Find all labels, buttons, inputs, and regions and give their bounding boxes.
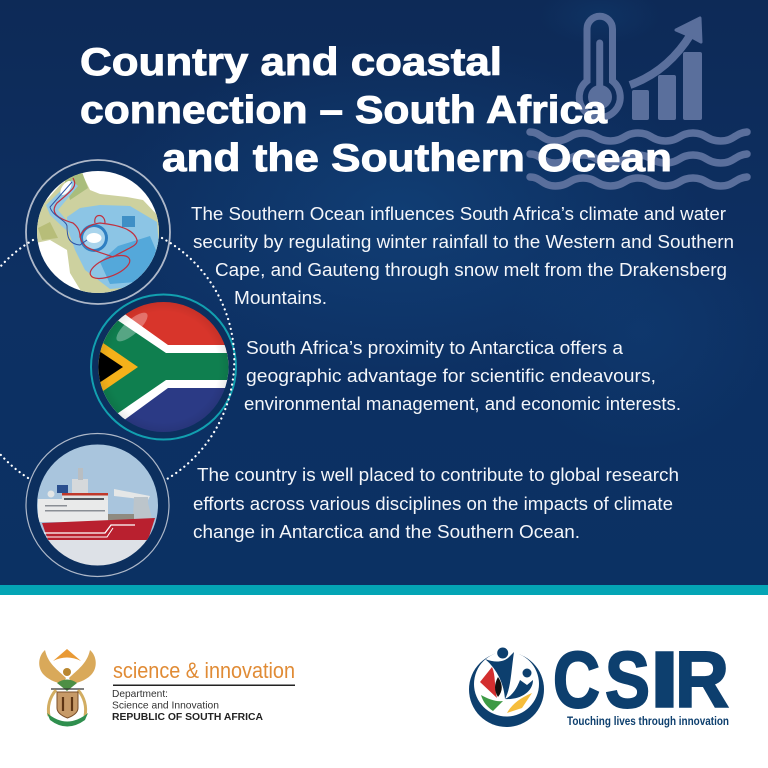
text block: proximity to Antarctica: geographic advantage for scientific endeavours,: [246, 365, 656, 386]
text block: climate and water security: security by regulating winter rainfall to the Western and Southern: [193, 231, 734, 252]
logo: CSIR wordmark: R: [675, 635, 729, 724]
text block: climate and water security: Mountains.: [234, 287, 327, 308]
text block: proximity to Antarctica: South Africa’s proximity to Antarctica offers a: [246, 337, 624, 358]
text block: proximity to Antarctica: [244, 337, 681, 414]
title: [80, 41, 672, 180]
text block: global research: The country is well placed to contribute to global research: [197, 464, 679, 485]
title: and the Southern Ocean: [162, 137, 672, 180]
logo: science and innovation wordmark: [112, 658, 295, 723]
logo: CSIR wordmark: I: [649, 635, 680, 724]
logo: CSIR emblem: [469, 646, 544, 727]
circle: Southern Ocean map: [26, 160, 170, 304]
circle: South African flag: [90, 294, 236, 440]
teal band: [0, 585, 768, 595]
icon: thermometer, rising chart and waves: [530, 16, 747, 186]
logo: science and innovation wordmark: science & innovation: [113, 658, 295, 683]
title: connection – South Africa: [80, 89, 607, 132]
logo: CSIR wordmark: C: [553, 635, 600, 724]
text block: global research: change in Antarctica and the Southern Ocean.: [193, 521, 580, 542]
circle: research ship in ice: [26, 434, 169, 576]
text block: global research: efforts across various disciplines on the impacts of climate: [193, 493, 673, 514]
text block: proximity to Antarctica: environmental management, and economic interests.: [244, 393, 681, 414]
panel: white footer: [0, 595, 768, 768]
panel: navy background: [0, 0, 768, 585]
logo: South African coat of arms: [39, 649, 96, 726]
title: Country and coastal: [80, 41, 502, 84]
logo: science and innovation wordmark: REPUBLIC OF SOUTH AFRICA: [112, 711, 263, 723]
logo: CSIR wordmark: [553, 635, 729, 728]
text block: climate and water security: The Southern Ocean influences South Africa’s climate and water: [191, 203, 726, 224]
text block: climate and water security: [191, 203, 734, 308]
logo: science and innovation wordmark: Department:: [112, 688, 168, 700]
logo: CSIR wordmark: S: [605, 635, 650, 724]
text block: climate and water security: Cape, and Gauteng through snow melt from the Drakensberg: [215, 259, 727, 280]
logo: science and innovation wordmark: Science and Innovation: [112, 700, 219, 712]
text block: global research: [193, 464, 679, 542]
dotted connecting arcs: [0, 238, 234, 479]
logo: CSIR wordmark: Touching lives through innovation: [567, 716, 729, 728]
